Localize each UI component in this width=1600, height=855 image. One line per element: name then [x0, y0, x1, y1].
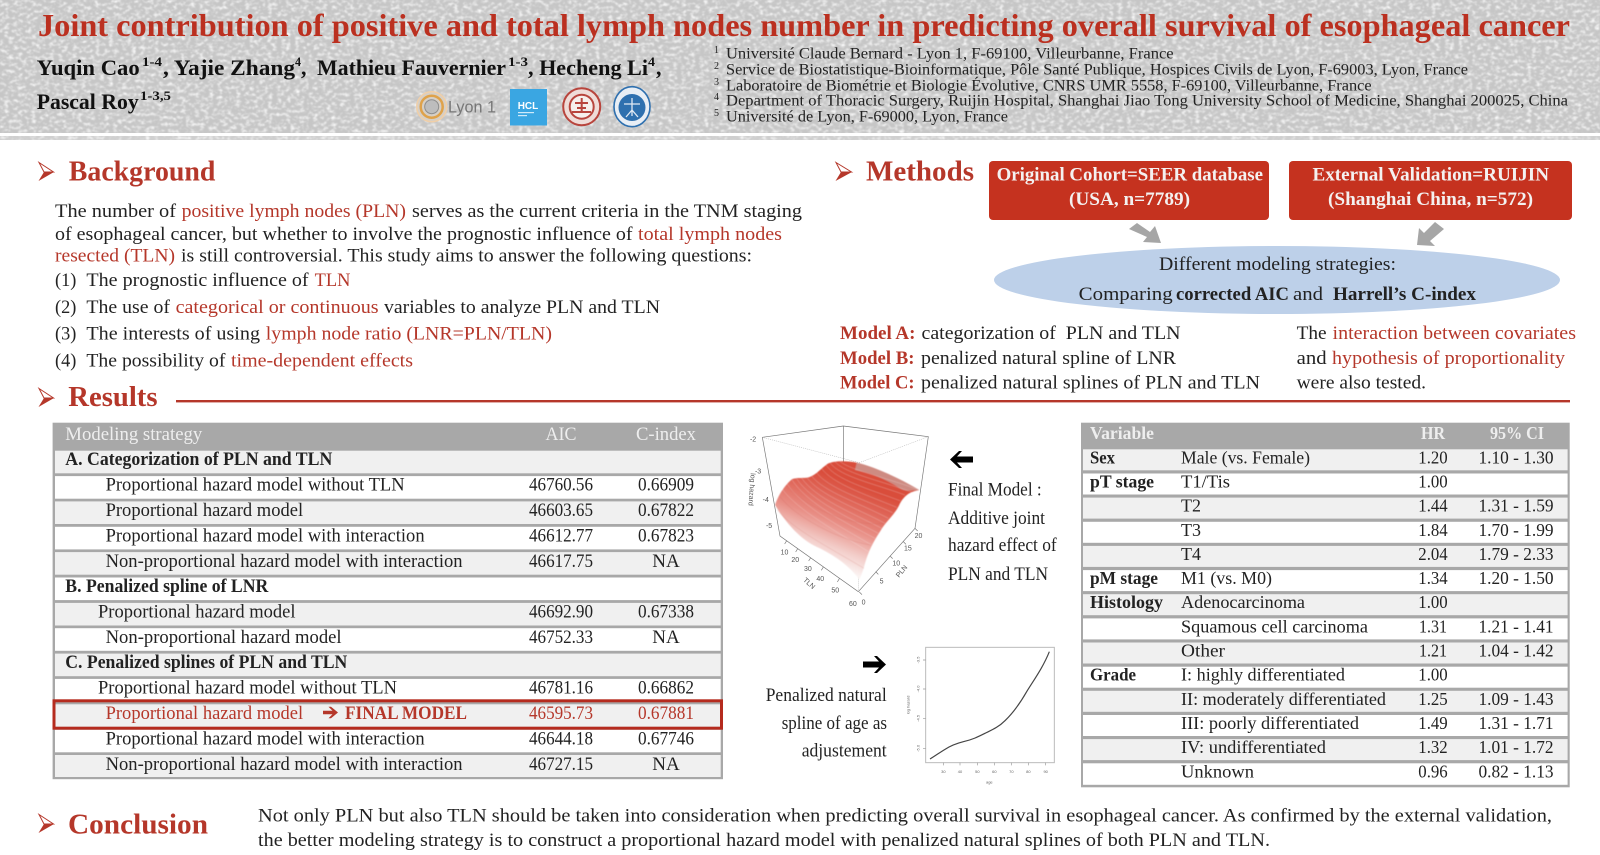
- row: A2: [55, 500, 721, 524]
- axis labels: 3D plot: TLN: [801, 577, 816, 591]
- row: A3: Proportional hazard model with interaction: [106, 526, 425, 547]
- icon: conclusion chevron: [38, 814, 54, 833]
- row: other histology: 1.04 - 1.42: [1478, 640, 1554, 660]
- row: unknown grade: [1083, 762, 1568, 785]
- ellipse: modeling strategies: corrected AIC: [1176, 284, 1289, 305]
- row: C3: Proportional hazard model with interaction: [106, 728, 425, 749]
- affiliations: Université Claude Bernard - Lyon 1, F-69100, Villeurbanne, France: [726, 46, 1174, 62]
- panel: conclusion: [38, 806, 1552, 851]
- row: A1: 46760.56: [529, 474, 593, 495]
- row: C2 final model: Proportional hazard model: [106, 703, 303, 724]
- row: squamous: Squamous cell carcinoma: [1181, 616, 1368, 636]
- box: external validation: (Shanghai China, n=572): [1328, 189, 1533, 210]
- logo: Lyon 1: [417, 92, 496, 122]
- row: A3: 0.67823: [638, 526, 694, 547]
- row: T2: 1.44: [1418, 496, 1448, 516]
- row: grade III: [1083, 713, 1568, 736]
- arrow: cohort to strategies: [1129, 223, 1161, 243]
- row: C3: 0.67746: [638, 728, 694, 749]
- authors: , Hecheng Li: [528, 55, 648, 80]
- affiliations: 5: [714, 108, 719, 119]
- row: A1: Proportional hazard model without TLN: [106, 474, 405, 495]
- text block: model list: [840, 323, 1260, 394]
- row: C4: [55, 754, 721, 777]
- row: A2: Proportional hazard model: [106, 500, 303, 521]
- icon: background chevron: [38, 162, 54, 181]
- table header: 95% CI: [1490, 423, 1544, 443]
- affiliations: Université de Lyon, F-69000, Lyon, France: [726, 109, 1008, 126]
- row: grade I: 1.00: [1418, 665, 1448, 685]
- text block: interaction note: were also tested.: [1297, 372, 1426, 394]
- row: B2: NA: [652, 627, 680, 648]
- row: A heading: A. Categorization of PLN and TLN: [65, 449, 333, 470]
- row: grade IV: 1.32: [1418, 737, 1448, 757]
- row: C3: [55, 728, 721, 752]
- ellipse: modeling strategies: and: [1293, 284, 1324, 305]
- axis labels: 3D plot: 5: [880, 579, 884, 586]
- row: grade II: 1.25: [1418, 689, 1448, 709]
- box: original cohort: [989, 161, 1269, 220]
- axis labels: spline plot: -3.5: [916, 656, 921, 663]
- authors: 4: [648, 54, 656, 69]
- row: M1: pM stage: [1090, 568, 1158, 588]
- text block: spline caption: adjustement: [802, 742, 888, 762]
- affiliations: Department of Thoracic Surgery, Ruijin Hospital, Shanghai Jiao Tong University School of Medicine, Shanghai 200025, China: [726, 92, 1568, 110]
- row: other histology: [1083, 640, 1568, 664]
- row: A3: [55, 526, 721, 549]
- panel: background: [38, 156, 803, 372]
- row: other histology: Other: [1181, 640, 1225, 660]
- title: Joint contribution of positive and total lymph nodes number in predicting overall survival of esophageal cancer: [38, 7, 1570, 43]
- text block: spline caption: spline of age as: [782, 714, 887, 734]
- table header: [1090, 423, 1544, 443]
- row: B heading: B. Penalized spline of LNR: [65, 576, 269, 597]
- axis labels: 3D plot: 60: [849, 601, 857, 608]
- axis labels: 3D plot: 20: [915, 533, 923, 540]
- text block: model list: Model A:: [840, 323, 916, 344]
- row: T2: 1.31 - 1.59: [1478, 496, 1554, 516]
- row: C1: 0.66862: [638, 678, 694, 699]
- authors: ,: [301, 55, 306, 80]
- row: grade II: [1083, 689, 1568, 712]
- logo: Shanghai Jiao Tong University: [563, 88, 600, 125]
- authors: Yuqin Cao: [37, 55, 140, 80]
- row: T1: [1083, 471, 1568, 494]
- row: C4: 46727.15: [529, 754, 593, 775]
- affiliations: 3: [714, 77, 719, 88]
- axis labels: 3D plot: -2: [750, 436, 756, 443]
- row: T3: 1.70 - 1.99: [1478, 520, 1554, 540]
- box: external validation: [1289, 161, 1572, 220]
- authors: Pascal Roy: [37, 89, 139, 114]
- logo: HCL: [510, 89, 547, 126]
- axis labels: 3D plot: -5: [766, 523, 772, 530]
- row: T4: [1083, 544, 1568, 567]
- text block: final model caption: hazard effect of: [948, 536, 1057, 556]
- row: A4: Non-proportional hazard model with interaction: [106, 551, 463, 572]
- panel: methods: [836, 156, 1576, 394]
- axis labels: 3D plot: 30: [804, 566, 812, 573]
- row: M1: M1 (vs. M0): [1181, 568, 1272, 588]
- axis labels: spline plot: 40: [958, 769, 963, 774]
- axis labels: spline plot: 90: [1043, 769, 1049, 774]
- text block: spline caption: Penalized natural: [766, 686, 887, 706]
- row: T3: [1083, 520, 1568, 543]
- row: adenocarcinoma: Adenocarcinoma: [1181, 592, 1305, 612]
- authors: 1-3,5: [140, 88, 172, 103]
- axis labels: spline plot: -4.0: [916, 685, 921, 692]
- row: A2: 46603.65: [529, 500, 593, 521]
- text block: question 4: [55, 351, 413, 372]
- authors: ,: [656, 55, 662, 80]
- row: B1: 0.67338: [638, 601, 694, 622]
- row: C2 final model: 0.67881: [638, 703, 694, 724]
- table header: [65, 424, 696, 445]
- row: grade IV: IV: undifferentiated: [1181, 737, 1326, 757]
- axis labels: 3D plot: PLN: [895, 564, 909, 579]
- row: T1: 1.00: [1418, 471, 1448, 491]
- axis labels: 3D plot: log hazard: [747, 473, 756, 506]
- row: sex: 1.10 - 1.30: [1478, 447, 1554, 467]
- axis labels: spline plot: log hazard: [905, 696, 910, 714]
- logo: medical school: [614, 87, 650, 127]
- text block: question 3: lymph node ratio (LNR=PLN/TLN): [266, 324, 552, 344]
- row: grade I: Grade: [1090, 665, 1136, 685]
- row: B2: Non-proportional hazard model: [106, 627, 342, 648]
- table header: C-index: [636, 424, 696, 445]
- affiliations: Service de Biostatistique-Bioinformatique, Pôle Santé Publique, Hospices Civils de Lyon, F-69003, Lyon, France: [726, 61, 1468, 78]
- affiliations: [714, 45, 1568, 126]
- axis labels: 3D plot: 10: [892, 560, 900, 567]
- row: T4: 2.04: [1418, 544, 1448, 564]
- row: unknown grade: 0.96: [1418, 762, 1448, 782]
- text block: interaction note: interaction between covariates: [1332, 323, 1576, 344]
- row: T3: T3: [1181, 520, 1201, 540]
- row: grade IV: 1.01 - 1.72: [1478, 737, 1554, 757]
- row: B heading: [55, 576, 721, 600]
- row: C heading: C. Penalized splines of PLN and TLN: [65, 652, 348, 673]
- text block: question 3: The interests of using: [86, 324, 261, 344]
- axis labels: 3D plot: [747, 436, 923, 608]
- authors: 1-4: [142, 54, 163, 69]
- row: grade III: III: poorly differentiated: [1181, 713, 1359, 733]
- text block: question 2: The use of: [86, 297, 171, 318]
- affiliations: Laboratoire de Biométrie et Biologie Évolutive, CNRS UMR 5558, F-69100, Villeurbanne, France: [726, 75, 1372, 94]
- row: squamous: 1.21 - 1.41: [1478, 616, 1554, 636]
- text block: question 3: (3): [55, 324, 76, 344]
- row: T4: 1.79 - 2.33: [1478, 544, 1554, 564]
- text block: question 2: categorical or continuous: [176, 297, 379, 318]
- row: B1: [55, 601, 721, 626]
- icon: methods chevron: [836, 162, 852, 181]
- row: grade IV: [1083, 737, 1568, 760]
- axis labels: spline plot: 50: [975, 769, 980, 774]
- row: A4: 46617.75: [529, 551, 593, 572]
- row: C1: 46781.16: [529, 678, 593, 699]
- row: B1: 46692.90: [529, 601, 593, 622]
- text block: question 2: variables to analyze PLN and TLN: [384, 297, 660, 318]
- row: B2: [55, 627, 721, 651]
- row: C2 final model: [55, 703, 721, 727]
- text block: background paragraph: serves as the current criteria in the TNM staging: [412, 201, 803, 222]
- row: A1: [55, 474, 721, 499]
- header banner: [0, 0, 1600, 140]
- axis labels: 3D plot: -4: [763, 497, 769, 504]
- row: C3: 46644.18: [529, 728, 593, 749]
- text block: interaction note: and: [1297, 348, 1327, 369]
- text block: model list: penalized natural splines of PLN and TLN: [921, 372, 1260, 394]
- logo: Lyon 1: Lyon 1: [448, 98, 496, 117]
- text block: interaction note: [1297, 323, 1576, 394]
- row: C1: [55, 678, 721, 702]
- row: A4: NA: [652, 551, 680, 572]
- text block: model list: penalized natural spline of LNR: [921, 348, 1176, 369]
- affiliations: 1: [714, 45, 719, 56]
- chart: 3D hazard surface: [747, 426, 928, 608]
- text block: background paragraph: The number of: [55, 201, 177, 222]
- heading: results: Results: [68, 381, 158, 413]
- ellipse: modeling strategies: Different modeling strategies:: [1159, 254, 1396, 275]
- text block: final model caption: [948, 481, 1057, 585]
- table: modeling strategies: [53, 423, 723, 779]
- row: squamous: 1.31: [1419, 616, 1447, 636]
- row: adenocarcinoma: 1.00: [1418, 592, 1448, 612]
- row: adenocarcinoma: [1083, 592, 1568, 615]
- text block: question 4: The possibility of: [86, 351, 226, 372]
- text block: spline caption: [766, 686, 888, 762]
- text block: background paragraph: [55, 201, 803, 267]
- row: M1: [1083, 568, 1568, 591]
- highlight: final model outline: [54, 701, 722, 728]
- axis labels: spline plot: 70: [1009, 769, 1014, 774]
- logo: HCL: HCL: [518, 101, 538, 112]
- row: A1: 0.66909: [638, 474, 694, 495]
- axis labels: spline plot: [905, 656, 1049, 784]
- row: adenocarcinoma: Histology: [1090, 592, 1163, 612]
- axis labels: spline plot: -5.0: [916, 744, 921, 752]
- text block: conclusion: Not only PLN but also TLN should be taken into consideration when predicting overall survival in esophageal cancer. As confirmed by the external validation,: [258, 806, 1552, 826]
- heading: background: Background: [69, 156, 215, 188]
- chart: age spline: [905, 647, 1054, 784]
- table header: HR: [1421, 423, 1445, 443]
- row: grade II: 1.09 - 1.43: [1478, 689, 1554, 709]
- affiliations: 4: [714, 92, 719, 103]
- authors: 1-3: [508, 54, 529, 69]
- row: T4: T4: [1181, 544, 1201, 564]
- axis labels: 3D plot: 0: [862, 600, 866, 607]
- box: original cohort: Original Cohort=SEER database: [997, 165, 1263, 186]
- authors: Mathieu Fauvernier: [317, 55, 506, 80]
- row: T2: T2: [1181, 496, 1201, 516]
- row: grade III: 1.31 - 1.71: [1478, 713, 1554, 733]
- axis labels: 3D plot: -3: [755, 469, 761, 476]
- axis labels: 3D plot: 50: [831, 588, 839, 595]
- text block: model list: categorization of PLN and TLN: [922, 323, 1181, 344]
- axis labels: spline plot: 30: [941, 769, 946, 774]
- text block: question 1: The prognostic influence of: [86, 270, 309, 291]
- heading: conclusion: Conclusion: [68, 808, 208, 840]
- row: sex: Sex: [1090, 447, 1115, 467]
- text block: conclusion: [258, 806, 1552, 851]
- text block: background paragraph: total lymph nodes: [638, 224, 782, 245]
- text block: background paragraph: positive lymph nodes (PLN): [182, 201, 406, 222]
- authors: 4: [295, 54, 301, 69]
- authors: , Yajie Zhang: [163, 55, 295, 80]
- arrow: to 3D plot: [950, 451, 973, 468]
- row: T1: T1/Tis: [1181, 471, 1230, 491]
- row: C1: Proportional hazard model without TLN: [98, 678, 397, 699]
- axis labels: 3D plot: 15: [904, 545, 912, 552]
- row: C4: Non-proportional hazard model with interaction: [106, 754, 463, 775]
- row: sex: 1.20: [1418, 447, 1448, 467]
- text block: question 2: [55, 297, 660, 318]
- row: C heading: [55, 652, 721, 676]
- row: unknown grade: 0.82 - 1.13: [1478, 762, 1554, 782]
- axis labels: spline plot: 80: [1026, 769, 1031, 774]
- row: C2 final model: 46595.73: [529, 703, 593, 724]
- row: grade I: [1083, 665, 1568, 688]
- text block: question 3: [55, 324, 552, 344]
- row: M1: 1.20 - 1.50: [1478, 568, 1554, 588]
- ellipse: modeling strategies: Comparing: [1079, 284, 1173, 305]
- axis labels: 3D plot: 40: [816, 576, 824, 583]
- affiliations: 2: [714, 61, 719, 72]
- row: B1: Proportional hazard model: [98, 601, 296, 622]
- table header: AIC: [546, 424, 576, 445]
- text block: question 1: (1): [55, 270, 76, 291]
- row: B2: 46752.33: [529, 627, 593, 648]
- text block: background paragraph: resected (TLN): [55, 246, 175, 267]
- box: original cohort: (USA, n=7789): [1069, 189, 1190, 210]
- text block: model list: Model B:: [840, 348, 914, 369]
- table header: Modeling strategy: [65, 424, 203, 445]
- axis labels: spline plot: age: [986, 779, 993, 784]
- arrow: validation to strategies: [1417, 222, 1444, 246]
- row: sex: Male (vs. Female): [1181, 447, 1310, 467]
- row: A4: [55, 551, 721, 575]
- row: A heading: [55, 449, 721, 473]
- row: other histology: 1.21: [1419, 640, 1447, 660]
- text block: model list: Model C:: [840, 372, 914, 394]
- row: squamous: [1083, 616, 1568, 639]
- row: T1: pT stage: [1090, 471, 1154, 491]
- arrow: to spline plot: [863, 656, 886, 673]
- table header: Variable: [1090, 423, 1154, 443]
- row: C2 final model: FINAL MODEL: [345, 703, 467, 724]
- row: C4: NA: [652, 754, 680, 775]
- row: A3: 46612.77: [529, 526, 593, 547]
- heading: results: [38, 381, 1570, 413]
- text block: background paragraph: of esophageal cancer, but whether to involve the prognostic influence of: [55, 224, 633, 245]
- axis labels: spline plot: 60: [992, 769, 997, 774]
- axis labels: 3D plot: 20: [791, 557, 799, 564]
- table: hazard ratios: [1081, 423, 1570, 787]
- text block: final model caption: Final Model :: [948, 481, 1042, 501]
- ellipse: modeling strategies: Harrell’s C-index: [1333, 284, 1477, 305]
- heading: methods: Methods: [866, 156, 974, 188]
- row: grade II: II: moderately differentiated: [1181, 689, 1386, 709]
- row: sex: [1083, 447, 1568, 470]
- text block: interaction note: hypothesis of proportionality: [1332, 348, 1566, 369]
- text block: interaction note: The: [1297, 323, 1327, 344]
- authors: [37, 54, 661, 114]
- axis labels: spline plot: -4.5: [916, 714, 921, 722]
- text block: question 1: TLN: [315, 270, 351, 291]
- box: external validation: External Validation=RUIJIN: [1312, 165, 1549, 186]
- text block: question 4: time-dependent effects: [231, 351, 413, 372]
- row: unknown grade: Unknown: [1181, 762, 1254, 782]
- text block: final model caption: Additive joint: [948, 509, 1046, 529]
- text block: question 4: (4): [55, 351, 76, 372]
- axis labels: 3D plot: 10: [781, 549, 789, 556]
- row: T3: 1.84: [1418, 520, 1448, 540]
- text block: background paragraph: is still controversial. This study aims to answer the following questions:: [181, 246, 752, 267]
- row: A2: 0.67822: [638, 500, 694, 521]
- row: grade III: 1.49: [1418, 713, 1448, 733]
- text block: final model caption: PLN and TLN: [948, 565, 1048, 585]
- text block: conclusion: the better modeling strategy is to construct a proportional hazard model with penalized natural splines of both PLN and TLN.: [258, 830, 1270, 851]
- row: grade I: I: highly differentiated: [1181, 665, 1345, 685]
- row: T2: [1083, 496, 1568, 519]
- text block: question 2: (2): [55, 297, 76, 318]
- row: M1: 1.34: [1418, 568, 1448, 588]
- ellipse: modeling strategies: [994, 246, 1560, 314]
